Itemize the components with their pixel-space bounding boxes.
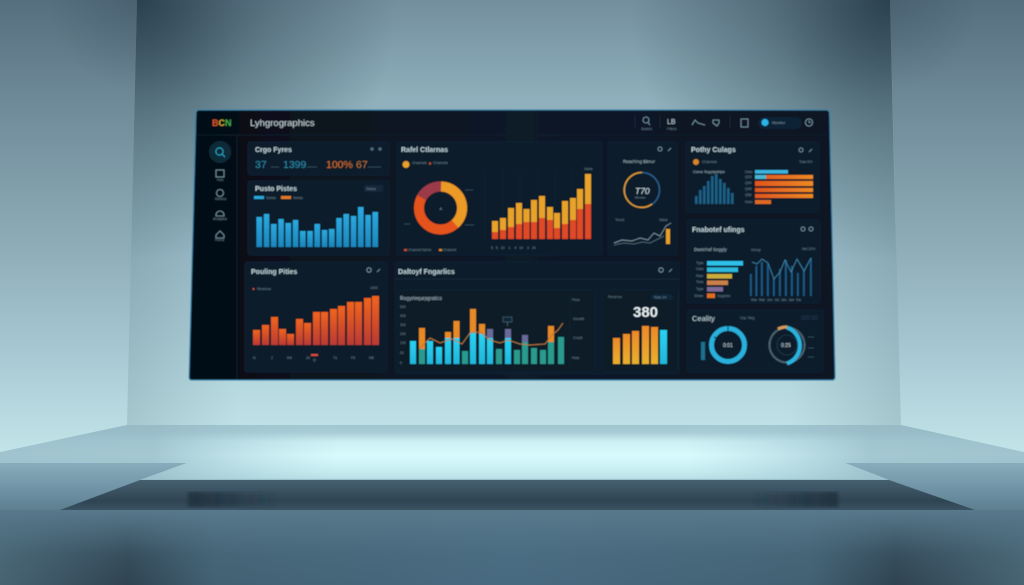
legend: Series [266, 196, 276, 200]
horizontal bars: Data [745, 170, 752, 174]
gauge: T70 [635, 186, 650, 196]
axis ticks: 50 [400, 351, 404, 355]
axis ticks [400, 305, 406, 365]
search button [209, 141, 231, 163]
panel: bars and line [687, 220, 820, 303]
horizontal bars: Tone [696, 280, 704, 284]
gauge: Minutes [635, 196, 646, 200]
panel: donut and stacked bars [397, 142, 602, 255]
logo: BCN [212, 118, 232, 128]
axis labels: T1 [333, 356, 337, 360]
legend [254, 196, 303, 200]
horizontal bars: Type [696, 287, 704, 291]
panel: KPI figures [248, 142, 389, 175]
axis labels [253, 354, 374, 362]
inner chart panel: Rogyrlequrpgratics [400, 296, 442, 302]
stacked bar chart: 5 5 10 1 4 14 3 24 [491, 246, 536, 250]
legend: Channels [412, 161, 427, 165]
horizontal bars: Rate [696, 274, 703, 278]
horizontal bars: Q56 [745, 193, 752, 197]
panel: KPI figures: 37 [255, 159, 267, 171]
line chart: Value [659, 218, 668, 222]
donut chart [419, 186, 462, 230]
panel: KPI figures: 100% [326, 159, 353, 171]
legend: Channels [433, 161, 448, 165]
histogram: Curve Supplyships [693, 170, 725, 174]
dashboard [189, 110, 835, 380]
line and column chart [750, 247, 815, 302]
axis labels: 20 [306, 356, 310, 360]
legend: 1000 [370, 286, 378, 290]
line and column chart: Mar Mar Jun Jul Jan Jan Ma [751, 298, 801, 302]
top icons: Filters [667, 127, 677, 131]
horizontal bars: Dustchaf Seggly [694, 247, 728, 252]
horizontal bars: Type [696, 261, 704, 265]
nav icons: Metrics [215, 197, 227, 201]
axis ticks: 300 [400, 323, 406, 327]
donut legend [404, 248, 456, 252]
horizontal bars: Q45 [745, 187, 752, 191]
nav icons: Home [215, 238, 224, 242]
panel: blue bar chart: Pusto Pistes [255, 186, 297, 193]
donut legend: Channel [443, 248, 456, 252]
panel: red bar chart: Pouling Pities [251, 269, 297, 276]
axis labels: F5 [351, 356, 355, 360]
panel: KPI figures: Crgo Fyres [255, 147, 292, 154]
legend [693, 159, 812, 165]
panel: rings [687, 310, 823, 372]
top icons [635, 115, 813, 131]
horizontal bars: Q34 [745, 181, 752, 185]
donut legend: Channel Name [408, 248, 431, 252]
panel: donut and stacked bars: Rafel Ctlarnas [401, 147, 448, 154]
panel: gauge and line [608, 142, 677, 255]
stacked bar chart: Value [584, 167, 593, 171]
axis labels: 2 [271, 356, 273, 360]
inner gauge panel [602, 290, 678, 372]
line chart [614, 218, 671, 245]
ring two: 0:25 [781, 343, 791, 349]
horizontal bars [694, 247, 743, 298]
axis labels: Q [313, 358, 316, 362]
right labels: Growth [573, 317, 584, 321]
panel: bars and line: Fnabotef ufings [692, 227, 745, 234]
horizontal bars: Data [696, 267, 703, 271]
horizontal bars [745, 170, 813, 204]
legend [402, 161, 448, 168]
dashboard title: Lyhgrographics [250, 118, 315, 129]
axis ticks: 100 [400, 341, 406, 345]
legend: Channels [702, 160, 717, 164]
legend: Total 5% [799, 160, 812, 164]
panel: rings: Ceality [692, 314, 715, 323]
axis ticks: 0 [400, 361, 402, 365]
right labels: Credit [573, 336, 582, 340]
donut chart: A [440, 206, 442, 211]
big number: 380 [633, 304, 658, 321]
axis ticks: 500 [400, 305, 406, 309]
gauge heading: Reaching Bimur [623, 159, 656, 164]
axis labels: N [253, 356, 256, 360]
top icons: LB [667, 119, 676, 126]
top icons: Search [641, 127, 652, 131]
panel: blue bar chart [248, 181, 389, 255]
stacked bar chart [485, 167, 593, 250]
axis ticks: 400 [400, 314, 406, 318]
horizontal bars: Q23 [745, 175, 752, 179]
panel: blue bar chart: Status [366, 187, 376, 191]
legend: Revenue [257, 287, 271, 291]
right labels [570, 296, 584, 366]
nav icons: Analytics [213, 217, 227, 221]
dashboard frame [189, 110, 835, 380]
panel: bar summary: Pothy Culags [691, 147, 736, 154]
line and column chart: Group [751, 248, 761, 252]
panel: rings: Cap [740, 316, 746, 320]
inner gauge panel: Revenue [608, 295, 622, 299]
horizontal bars: Share [694, 294, 703, 298]
legend: Series [293, 196, 303, 200]
axis ticks: 200 [400, 332, 406, 336]
horizontal bars: Supplies [717, 294, 731, 298]
panel: KPI figures: 1399 [283, 159, 307, 171]
callout [503, 317, 512, 326]
sidebar [197, 135, 829, 379]
axis labels: M8 [369, 356, 374, 360]
right labels: Rate [572, 356, 579, 360]
top icons: Monitor [772, 120, 786, 125]
top bar [212, 115, 813, 131]
nav icons [213, 170, 227, 242]
panel: KPI figures: 67 [356, 159, 368, 171]
panel: rings: Neg [748, 316, 754, 320]
inner gauge panel: Rate 24 [654, 296, 666, 300]
floor shadow [0, 480, 1024, 585]
legend [252, 286, 378, 291]
panel: combined chart: Daltoyf Fngarlics [398, 269, 455, 276]
gauge [624, 172, 660, 208]
line chart: Trend [615, 218, 624, 222]
horizontal bars: Data [745, 200, 752, 204]
bars [410, 309, 564, 364]
inner chart panel [398, 290, 595, 372]
line and column chart: Net 10% [802, 247, 815, 251]
bars [253, 296, 379, 345]
axis labels: M4 [287, 356, 292, 360]
right labels: Price [572, 298, 580, 302]
column bars [613, 326, 667, 364]
floor platform [0, 425, 1024, 480]
trend line [419, 323, 563, 349]
nav icons: Hub [217, 178, 223, 182]
ring one: 0:01 [723, 343, 733, 349]
bars [256, 207, 378, 247]
panel: bar summary [686, 142, 819, 212]
panel: combined chart [395, 262, 679, 374]
panel: red bar chart [245, 262, 387, 372]
